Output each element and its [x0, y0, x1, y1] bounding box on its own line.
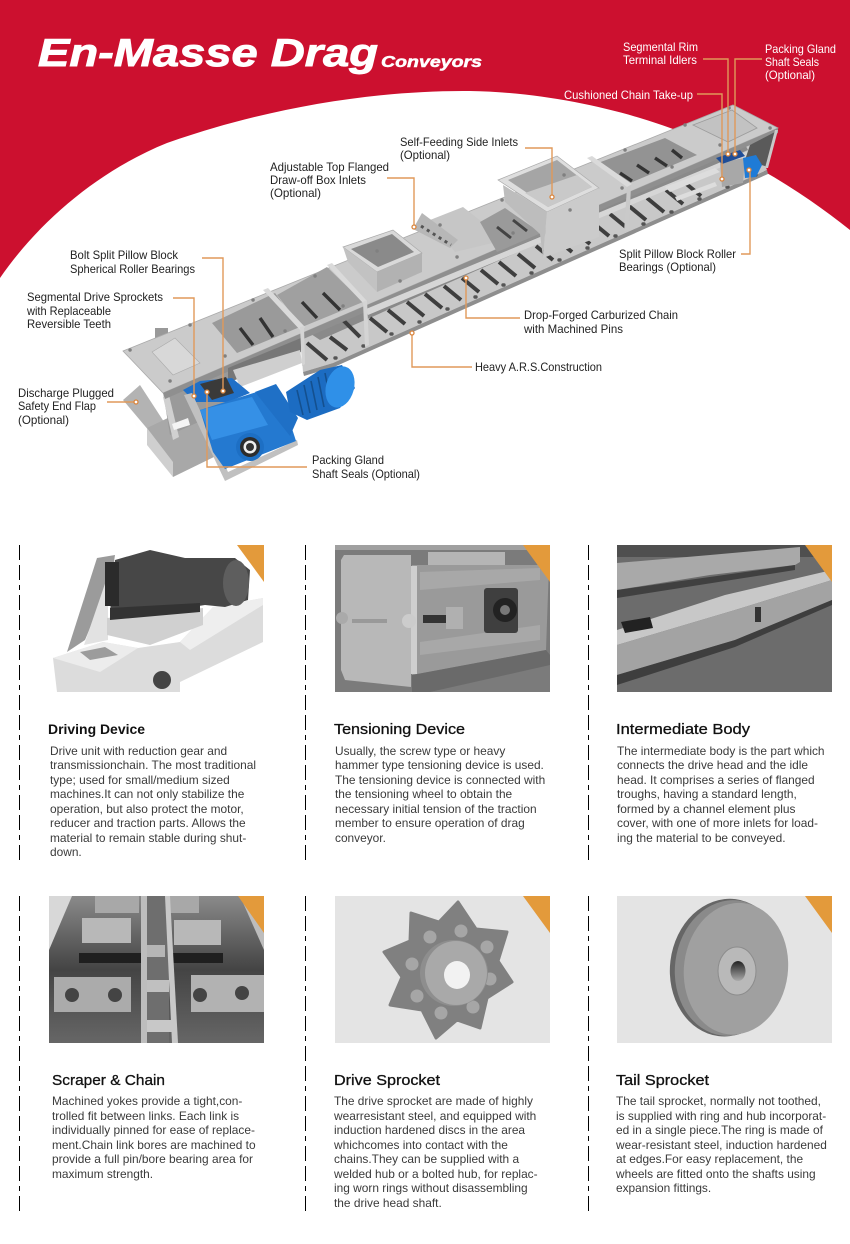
- text: driving device description: operation, but also protect the motor,: [50, 802, 244, 816]
- text: intermediate body description: cover, with one of more inlets for load-: [617, 816, 818, 830]
- lower frame and end flap: [123, 365, 236, 477]
- text: drive sprocket description: the drive head shaft.: [334, 1196, 442, 1210]
- heading: intermediate body: Intermediate Body: [616, 721, 751, 738]
- photo: intermediate body: [617, 545, 832, 692]
- text: tail sprocket description: is supplied with ring and hub incorporat-: [616, 1109, 826, 1123]
- label: packing gland shaft seals bottom: [312, 453, 420, 481]
- label: packing gland shaft seals top: [765, 42, 836, 82]
- text: scraper and chain description: [52, 1094, 256, 1181]
- text: drive sprocket description: [333, 1094, 538, 1210]
- label: bolt split pillow block: Bolt Split Pillow Block: [70, 248, 179, 262]
- dashed column dividers: [20, 545, 588, 1213]
- photo: drive sprocket: [335, 896, 550, 1043]
- text: scraper and chain description: provide a full pin/bore bearing area for: [52, 1152, 253, 1166]
- heading: scraper and chain: Scraper & Chain: [52, 1072, 165, 1089]
- title: En-Masse Drag: [38, 32, 378, 75]
- label: self-feeding side inlets: (Optional): [400, 148, 450, 162]
- label: heavy A.R.S. construction: Heavy A.R.S.Construction: [475, 360, 602, 374]
- text: scraper and chain description: Machined yokes provide a tight,con-: [52, 1094, 242, 1108]
- text: tensioning device description: hammer type tensioning device is used.: [335, 758, 544, 772]
- text: intermediate body description: [617, 744, 825, 845]
- title: Conveyors: [381, 54, 482, 71]
- panel: intermediate body: [616, 545, 832, 845]
- label: packing gland shaft seals top: Shaft Seals: [765, 55, 819, 69]
- text: drive sprocket description: welded hub or a bolted hub, for replac-: [333, 1167, 538, 1181]
- photo: scraper and chain: [49, 896, 264, 1043]
- label: adjustable top flanged inlets: (Optional): [270, 186, 321, 200]
- text: driving device description: [50, 744, 256, 859]
- text: tensioning device description: Usually, the screw type or heavy: [335, 744, 505, 758]
- panel: scraper and chain: [49, 896, 264, 1181]
- text: driving device description: reducer and traction parts. Allows the: [50, 816, 246, 830]
- label: packing gland shaft seals bottom: Shaft Seals (Optional): [312, 467, 420, 481]
- gear reducer and motor: [200, 363, 359, 469]
- callout labels: [18, 40, 836, 481]
- text: tensioning device description: The tensioning device is connected with: [335, 773, 545, 787]
- text: scraper and chain description: trolled fit between links. Each link is: [52, 1109, 239, 1123]
- text: driving device description: down.: [50, 845, 82, 859]
- text: tail sprocket description: wheels are fitted onto the shafts using: [615, 1167, 816, 1181]
- text: driving device description: material to remain stable during shut-: [50, 831, 246, 845]
- label: self-feeding side inlets: Self-Feeding Side Inlets: [400, 135, 518, 149]
- label: cushioned chain take-up: Cushioned Chain Take-up: [564, 88, 693, 102]
- label: bolt split pillow block: [70, 248, 195, 276]
- label: segmental drive sprockets: with Replaceable: [26, 304, 111, 318]
- label: segmental rim terminal idlers: Terminal Idlers: [623, 53, 697, 67]
- title: [38, 32, 482, 75]
- text: tail sprocket description: ed in a single piece.The ring is made of: [616, 1123, 824, 1137]
- text: drive sprocket description: wearresistant steel, and equipped with: [333, 1109, 536, 1123]
- label: split pillow block roller bearings: [619, 247, 736, 274]
- panel: tail sprocket: [615, 892, 832, 1195]
- panel: driving device: [48, 545, 264, 859]
- photo: tensioning device: [335, 545, 550, 692]
- label: packing gland shaft seals top: (Optional): [765, 68, 815, 82]
- text: intermediate body description: The intermediate body is the part which: [617, 744, 825, 758]
- text: driving device description: machines.It can not only stabilize the: [50, 787, 245, 801]
- text: tensioning device description: the tensioning wheel to obtain the: [335, 787, 513, 801]
- text: scraper and chain description: maximum strength.: [52, 1167, 153, 1181]
- conveyor illustration: [123, 105, 778, 481]
- text: tail sprocket description: wear-resistant steel, induction hardened: [615, 1138, 827, 1152]
- label: packing gland shaft seals bottom: Packing Gland: [312, 453, 384, 467]
- inlet boxes: [343, 156, 599, 292]
- callout leader lines: [107, 59, 762, 467]
- text: intermediate body description: formed by a channel element plus: [617, 802, 796, 816]
- text: tail sprocket description: at edges.For easy replacement, the: [616, 1152, 803, 1166]
- label: adjustable top flanged inlets: Draw-off Box Inlets: [270, 173, 366, 187]
- label: discharge plugged safety end flap: Discharge Plugged: [18, 386, 114, 400]
- text: scraper and chain description: individually pinned for ease of replace-: [52, 1123, 255, 1137]
- label: split pillow block roller bearings: Bearings (Optional): [619, 260, 716, 274]
- main top plate: [123, 105, 778, 393]
- text: drive sprocket description: The drive sprocket are made of highly: [334, 1094, 533, 1108]
- text: intermediate body description: ing the material to be conveyed.: [617, 831, 786, 845]
- text: driving device description: type; used for small/medium sized: [50, 773, 230, 787]
- vertical ribs and cover plates: [152, 110, 757, 375]
- top plate windows with bars: [212, 138, 697, 353]
- label: segmental rim terminal idlers: [623, 40, 698, 67]
- photo: driving device: [49, 545, 264, 692]
- photo: tail sprocket: [617, 892, 832, 1044]
- label: segmental rim terminal idlers: Segmental Rim: [623, 40, 698, 54]
- text: drive sprocket description: ing worn rings without disassembling: [334, 1181, 528, 1195]
- text: drive sprocket description: induction hardened discs in the area: [334, 1123, 525, 1137]
- text: tail sprocket description: expansion fittings.: [616, 1181, 711, 1195]
- label: packing gland shaft seals top: Packing Gland: [765, 42, 836, 56]
- text: tensioning device description: necessary initial tension of the traction: [335, 802, 537, 816]
- text: driving device description: transmissionchain. The most traditional: [50, 758, 256, 772]
- text: intermediate body description: connects the drive head and the idle: [617, 758, 808, 772]
- text: tail sprocket description: The tail sprocket, normally not toothed,: [616, 1094, 821, 1108]
- blue head bearing: [183, 377, 250, 402]
- text: intermediate body description: head. It comprises a series of flanged: [617, 773, 815, 787]
- label: discharge plugged safety end flap: Safety End Flap: [18, 399, 96, 413]
- text: scraper and chain description: ment.Chain link bores are machined to: [52, 1138, 256, 1152]
- panel: tensioning device: [334, 545, 550, 845]
- red header background: [0, 0, 850, 278]
- text: drive sprocket description: whichcomes into contact with the: [333, 1138, 508, 1152]
- mid flange strips: [163, 128, 778, 399]
- label: drop-forged carburized chain: [523, 308, 678, 336]
- motor base plate: [184, 393, 298, 481]
- label: discharge plugged safety end flap: (Optional): [18, 413, 69, 427]
- label: bolt split pillow block: Spherical Roller Bearings: [70, 262, 195, 276]
- label: adjustable top flanged inlets: [270, 160, 389, 200]
- text: driving device description: Drive unit with reduction gear and: [50, 744, 227, 758]
- panel: drive sprocket: [333, 896, 550, 1210]
- text: intermediate body description: troughs, having a standard length,: [617, 787, 797, 801]
- inlet pipe behind plate: [155, 328, 168, 338]
- text: tensioning device description: conveyor.: [335, 831, 386, 845]
- heading: driving device: Driving Device: [48, 721, 145, 737]
- label: drop-forged carburized chain: Drop-Forged Carburized Chain: [524, 308, 678, 322]
- label: adjustable top flanged inlets: Adjustable Top Flanged: [270, 160, 389, 174]
- label: discharge plugged safety end flap: [18, 386, 114, 427]
- label: split pillow block roller bearings: Split Pillow Block Roller: [619, 247, 736, 261]
- text: drive sprocket description: chains.They can be supplied with a: [334, 1152, 519, 1166]
- conveyor floor with chain bars: [300, 135, 768, 376]
- bolts: [130, 108, 770, 381]
- text: tensioning device description: [335, 744, 545, 845]
- label: segmental drive sprockets: [26, 290, 163, 331]
- heading: tensioning device: Tensioning Device: [334, 721, 465, 738]
- label: self-feeding side inlets: [400, 135, 518, 162]
- heading: tail sprocket: Tail Sprocket: [616, 1072, 710, 1089]
- text: tail sprocket description: [615, 1094, 827, 1195]
- text: tensioning device description: member to ensure operation of drag: [335, 816, 525, 830]
- end section and take-up: [665, 130, 778, 201]
- heading: drive sprocket: Drive Sprocket: [334, 1072, 441, 1089]
- label: segmental drive sprockets: Segmental Drive Sprockets: [27, 290, 163, 304]
- label: drop-forged carburized chain: with Machined Pins: [523, 322, 623, 336]
- label: segmental drive sprockets: Reversible Teeth: [27, 317, 111, 331]
